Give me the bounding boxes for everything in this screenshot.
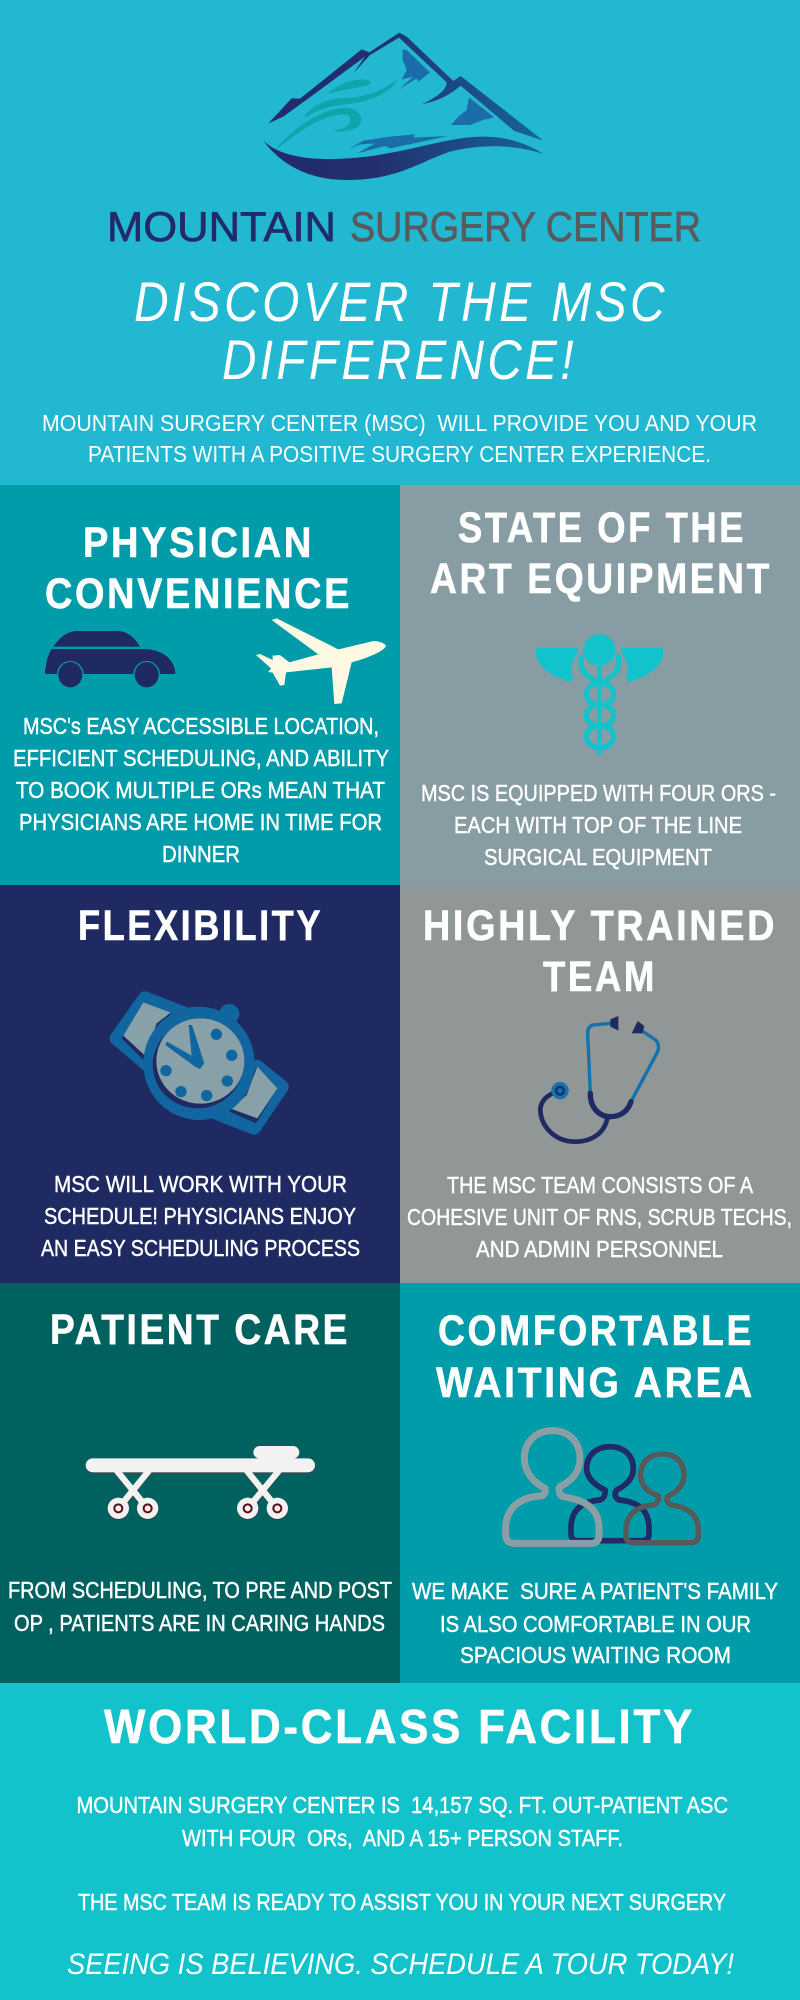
body text: team: AND ADMIN PERSONNEL xyxy=(476,1236,723,1262)
logo wordmark: SURGERY CENTER xyxy=(350,203,701,250)
heading: comfortable waiting area xyxy=(436,1307,755,1407)
body text: physician convenience: EFFICIENT SCHEDULING, AND ABILITY xyxy=(13,745,389,771)
icon: car xyxy=(45,631,175,688)
body text: flexibility xyxy=(41,1171,360,1261)
body text: physician convenience: DINNER xyxy=(162,841,240,867)
icon: three people xyxy=(506,1431,698,1543)
body text: equipment: EACH WITH TOP OF THE LINE xyxy=(454,812,742,838)
heading: patient care: PATIENT CARE xyxy=(50,1306,350,1354)
call to action: SEEING IS BELIEVING. SCHEDULE A TOUR TODAY! xyxy=(67,1948,735,1981)
heading: highly trained team: TEAM xyxy=(543,953,657,1001)
body text: patient care: FROM SCHEDULING, TO PRE AND POST xyxy=(8,1577,392,1603)
body text: physician convenience: TO BOOK MULTIPLE ORs MEAN THAT xyxy=(16,777,385,803)
body text: physician convenience: MSC's EASY ACCESSIBLE LOCATION, xyxy=(23,713,379,739)
heading: state of the art equipment xyxy=(430,504,772,603)
heading: flexibility: FLEXIBILITY xyxy=(78,902,323,950)
heading: state of the art equipment: STATE OF THE xyxy=(458,504,746,552)
panel: physician convenience xyxy=(0,485,400,885)
logo wordmark xyxy=(107,203,701,250)
intro text xyxy=(42,410,757,467)
body text: team xyxy=(407,1172,792,1262)
body text: flexibility: SCHEDULE! PHYSICIANS ENJOY xyxy=(44,1203,356,1229)
panel: comfortable waiting area xyxy=(400,1283,800,1683)
panel: flexibility xyxy=(0,885,400,1283)
heading: highly trained team xyxy=(423,902,777,1001)
icon: caduceus xyxy=(536,634,663,753)
body text: waiting area xyxy=(412,1578,778,1668)
title xyxy=(134,270,668,391)
body text: equipment: SURGICAL EQUIPMENT xyxy=(484,844,712,870)
panel: highly trained team xyxy=(400,885,800,1283)
body text: patient care xyxy=(8,1577,392,1636)
body text: team: THE MSC TEAM CONSISTS OF A xyxy=(447,1172,754,1198)
heading: comfortable waiting area: WAITING AREA xyxy=(436,1359,755,1407)
body text: waiting area: SPACIOUS WAITING ROOM xyxy=(460,1642,731,1668)
body text: facility facts: WITH FOUR ORs, AND A 15+ PERSON STAFF. xyxy=(182,1825,623,1851)
icon: wristwatch xyxy=(117,998,282,1128)
heading: physician convenience xyxy=(45,519,352,618)
icon: airplane xyxy=(256,618,386,704)
heading: physician convenience: CONVENIENCE xyxy=(45,570,352,618)
icon: mountain logo xyxy=(263,33,543,180)
body text: physician convenience: PHYSICIANS ARE HOME IN TIME FOR xyxy=(19,809,382,835)
body text: facility facts xyxy=(76,1792,728,1851)
intro text: PATIENTS WITH A POSITIVE SURGERY CENTER EXPERIENCE. xyxy=(88,441,711,467)
heading: comfortable waiting area: COMFORTABLE xyxy=(438,1307,754,1355)
body text: equipment xyxy=(421,780,776,870)
panel: world-class facility xyxy=(0,1683,800,2000)
body text: flexibility: MSC WILL WORK WITH YOUR xyxy=(54,1171,347,1197)
heading: physician convenience: PHYSICIAN xyxy=(83,519,314,567)
title: DIFFERENCE! xyxy=(222,328,577,391)
body text: flexibility: AN EASY SCHEDULING PROCESS xyxy=(41,1235,360,1261)
body text: patient care: OP , PATIENTS ARE IN CARING HANDS xyxy=(14,1610,385,1636)
icon: stretcher xyxy=(86,1446,315,1519)
logo wordmark: MOUNTAIN xyxy=(107,203,336,250)
icon: stethoscope xyxy=(540,1016,658,1142)
heading: world-class facility: WORLD-CLASS FACILITY xyxy=(104,1701,695,1754)
body text: physician convenience xyxy=(13,713,389,867)
panel: patient care xyxy=(0,1283,400,1683)
panel: header xyxy=(0,0,800,485)
panel: state of the art equipment xyxy=(400,485,800,885)
body text: waiting area: IS ALSO COMFORTABLE IN OUR xyxy=(440,1611,751,1637)
title: DISCOVER THE MSC xyxy=(134,270,668,333)
body text: facility facts: MOUNTAIN SURGERY CENTER IS 14,157 SQ. FT. OUT-PATIENT ASC xyxy=(76,1792,728,1818)
